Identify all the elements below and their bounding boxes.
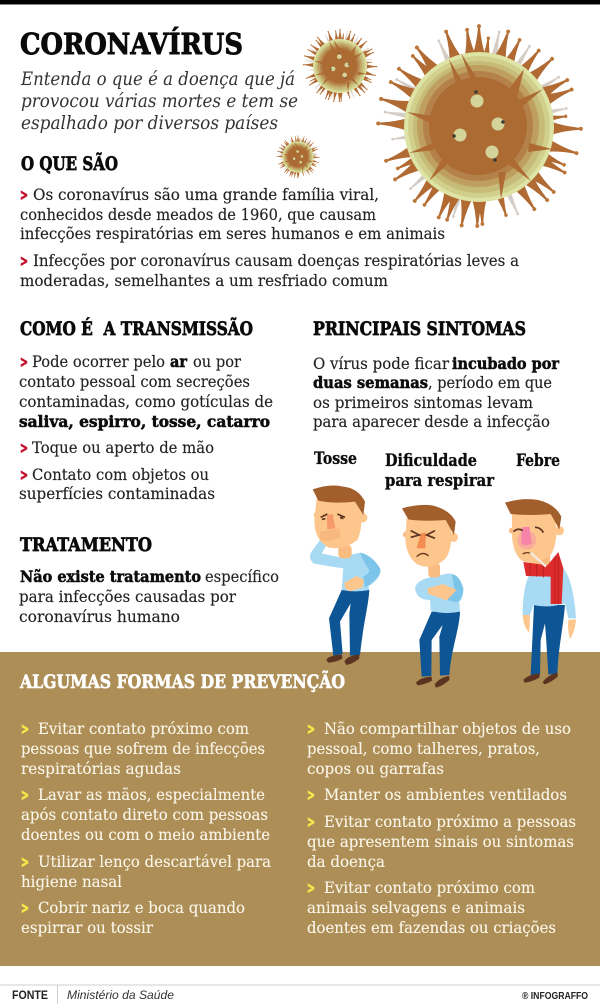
list: prevenção coluna direita: que apresentem sinais ou sintomas xyxy=(307,832,574,851)
text block: o que são: > xyxy=(20,252,28,270)
list: prevenção coluna direita: Manter os ambientes ventilados xyxy=(324,785,567,804)
list: prevenção coluna esquerda: > xyxy=(21,853,29,871)
text block: transmissão: ar xyxy=(170,352,188,371)
list: prevenção coluna direita: copos ou garrafas xyxy=(307,759,444,778)
subtitle: provocou várias mortes e tem se xyxy=(21,91,298,112)
text block: o que são: > xyxy=(20,186,28,204)
list: prevenção coluna esquerda: > xyxy=(21,899,29,917)
list: prevenção coluna esquerda xyxy=(21,719,271,937)
text block: o que são xyxy=(20,185,519,290)
text block: o que são: Infecções por coronavírus causam doenças respiratórias leves a xyxy=(33,251,519,270)
list: prevenção coluna direita xyxy=(307,719,576,937)
list: prevenção coluna direita: > xyxy=(307,879,315,897)
text block: sintomas xyxy=(313,354,560,431)
panel: prevenção background xyxy=(0,652,600,966)
list: prevenção coluna direita: Evitar contato próximo com xyxy=(324,878,535,897)
text block: o que são: infecções respiratórias em seres humanos e em animais xyxy=(20,224,445,243)
text block: sintomas: os primeiros sintomas levam xyxy=(313,393,533,412)
list: prevenção coluna esquerda: Utilizar lenço descartável para xyxy=(38,852,271,871)
text block: transmissão: Contato com objetos ou xyxy=(32,465,209,484)
list: prevenção coluna esquerda: respiratórias agudas xyxy=(21,759,181,778)
label: Tosse: Tosse xyxy=(314,449,357,469)
text block: o que são: conhecidos desde meados de 1960, que causam xyxy=(20,205,376,224)
list: prevenção coluna esquerda: após contato direto com pessoas xyxy=(21,805,268,824)
text block: transmissão: Pode ocorrer pelo xyxy=(32,352,165,371)
illustration: man with fever and scarf xyxy=(505,499,576,684)
source name: Ministério da Saúde xyxy=(67,990,174,1002)
text block: o que são: Os coronavírus são uma grande família viral, xyxy=(33,185,379,204)
text block: tratamento: Não existe tratamento xyxy=(20,567,201,586)
text block: sintomas: incubado por xyxy=(452,354,560,373)
title: CORONAVÍRUS xyxy=(20,26,243,61)
text block: transmissão: > xyxy=(20,466,28,484)
list: prevenção coluna direita: doentes em fazendas ou criações xyxy=(307,918,556,937)
list: prevenção coluna direita: > xyxy=(307,786,315,804)
text block: transmissão: > xyxy=(20,439,28,457)
text block: sintomas: O vírus pode ficar xyxy=(313,354,449,373)
list: prevenção coluna esquerda: espirrar ou tossir xyxy=(21,918,153,937)
illustration: man short of breath xyxy=(402,505,463,688)
heading: Principais sintomas: PRINCIPAIS SINTOMAS xyxy=(313,319,526,340)
text block: sintomas: , período em que xyxy=(428,373,552,392)
heading: O que são: O QUE SÃO xyxy=(21,152,118,175)
text block: transmissão: Toque ou aperto de mão xyxy=(32,438,214,457)
list: prevenção coluna esquerda: Evitar contato próximo com xyxy=(38,719,249,738)
subtitle: Entenda o que é a doença que já xyxy=(20,69,295,90)
text block: transmissão: ou por xyxy=(193,352,241,371)
top bar xyxy=(0,0,600,5)
text block: tratamento: para infecções causadas por xyxy=(19,587,236,606)
heading: Tratamento: TRATAMENTO xyxy=(20,535,152,556)
list: prevenção coluna esquerda: doentes ou com o meio ambiente xyxy=(21,825,270,844)
text block: transmissão: saliva, espirro, tosse, catarro xyxy=(19,412,270,431)
footer xyxy=(0,984,600,1004)
list: prevenção coluna direita: > xyxy=(307,720,315,738)
text block: transmissão: superfícies contaminadas xyxy=(19,484,215,503)
text block: o que são: moderadas, semelhantes a um resfriado comum xyxy=(20,271,388,290)
subtitle xyxy=(20,69,298,134)
subtitle: espalhado por diversos países xyxy=(21,113,278,134)
illustration: large coronavirus xyxy=(376,24,583,228)
text block: transmissão xyxy=(19,352,273,503)
illustration: small coronavirus xyxy=(276,135,320,178)
source label: FONTE xyxy=(12,988,48,1002)
text block: transmissão: > xyxy=(20,353,28,371)
label: Dificuldade para respirar: Dificuldade xyxy=(385,451,477,471)
illustration: medium coronavirus xyxy=(303,29,377,103)
list: prevenção coluna esquerda: > xyxy=(21,786,29,804)
label: Febre: Febre xyxy=(516,451,560,471)
list: prevenção coluna direita: pessoal, como talheres, pratos, xyxy=(307,739,540,758)
list: prevenção coluna direita: Não compartilhar objetos de uso xyxy=(324,719,571,738)
list: prevenção coluna direita: Evitar contato próximo a pessoas xyxy=(324,812,576,831)
list: prevenção coluna direita: da doença xyxy=(307,852,385,871)
label: Dificuldade para respirar: para respirar xyxy=(385,471,495,491)
text block: tratamento xyxy=(19,567,279,626)
list: prevenção coluna esquerda: pessoas que sofrem de infecções xyxy=(21,739,265,758)
list: prevenção coluna direita: > xyxy=(307,813,315,831)
list: prevenção coluna direita: animais selvagens e animais xyxy=(307,898,525,917)
list: prevenção coluna esquerda: higiene nasal xyxy=(21,872,122,891)
text block: transmissão: contato pessoal com secreções xyxy=(19,372,250,391)
text block: sintomas: duas semanas xyxy=(313,373,428,392)
illustration: man coughing xyxy=(310,485,380,665)
text block: tratamento: específico xyxy=(205,567,279,586)
list: prevenção coluna esquerda: > xyxy=(21,720,29,738)
list: prevenção coluna esquerda: Cobrir nariz e boca quando xyxy=(38,898,245,917)
credit logo: ® INFOGRAFFO xyxy=(522,991,588,1002)
text block: sintomas: para aparecer desde a infecção xyxy=(313,412,550,431)
text block: transmissão: contaminadas, como gotículas de xyxy=(19,392,273,411)
heading: Como é a transmissão: COMO É A TRANSMISSÃO xyxy=(20,317,253,340)
label: Dificuldade para respirar xyxy=(385,451,495,491)
text block: tratamento: coronavírus humano xyxy=(19,607,180,626)
heading: Algumas formas de prevenção: ALGUMAS FORMAS DE PREVENÇÃO xyxy=(19,670,345,693)
list: prevenção coluna esquerda: Lavar as mãos, especialmente xyxy=(38,785,265,804)
